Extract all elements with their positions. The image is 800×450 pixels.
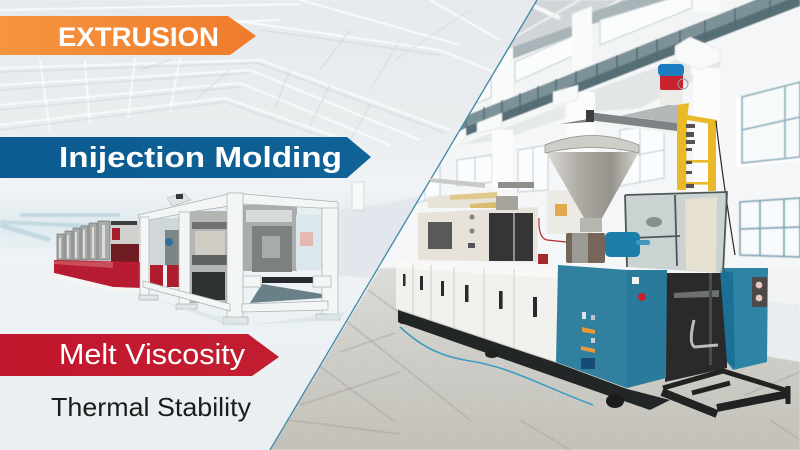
- ceiling: [360, 0, 640, 112]
- feet: [139, 295, 340, 324]
- upper columns: [437, 0, 720, 125]
- yellow ladder: [677, 103, 717, 191]
- window: lower right: [740, 198, 800, 257]
- label: melt viscosity: [0, 334, 279, 376]
- red base: [54, 260, 140, 288]
- floor: [270, 268, 800, 450]
- metal barrel: [566, 233, 605, 263]
- text: thermal stability: Thermal Stability: [51, 392, 251, 422]
- lower wall: [360, 5, 800, 370]
- white cabinets: [396, 260, 558, 362]
- diagonal divider line: [270, 0, 537, 450]
- upper wall band: [360, 0, 800, 157]
- floor shadow: [158, 300, 345, 326]
- label: extrusion: [0, 16, 256, 55]
- hopper: [545, 136, 639, 232]
- blue right box: [720, 268, 768, 370]
- black frame: [662, 371, 788, 414]
- steel beam: [368, 0, 800, 172]
- white frame: [138, 193, 338, 323]
- blue cable: [400, 327, 593, 405]
- white panel behind: [547, 190, 592, 234]
- upper window frames: [408, 0, 692, 114]
- beacon and arm: [560, 64, 688, 134]
- machine: left injection molding unit: [54, 193, 345, 326]
- red cable and box: [539, 218, 566, 242]
- brackets: [428, 37, 720, 160]
- panel: injection molding hall: [0, 0, 540, 450]
- silver canisters: [57, 221, 110, 260]
- blue cabinet: [556, 265, 627, 388]
- machine: right extrusion line: [396, 64, 788, 414]
- hazy background structure: [0, 215, 135, 240]
- label: injection molding: Inijection Molding: [59, 142, 342, 174]
- window: upper right: [736, 80, 800, 168]
- upper windows: [411, 0, 692, 133]
- black base rail: [398, 310, 670, 410]
- lower windows: [411, 124, 664, 205]
- control box: [418, 178, 538, 262]
- label: melt viscosity: Melt Viscosity: [59, 339, 246, 371]
- machine interior: [149, 218, 179, 266]
- ceiling trusses: [0, 0, 537, 145]
- columns: [492, 68, 720, 202]
- black radiator: [665, 273, 727, 382]
- sensor on top: [167, 193, 191, 206]
- blue motor: [605, 232, 640, 257]
- label: injection molding: [0, 137, 371, 178]
- glass enclosure: [625, 192, 727, 273]
- black cable: [716, 121, 735, 255]
- label: extrusion: EXTRUSION: [58, 22, 219, 52]
